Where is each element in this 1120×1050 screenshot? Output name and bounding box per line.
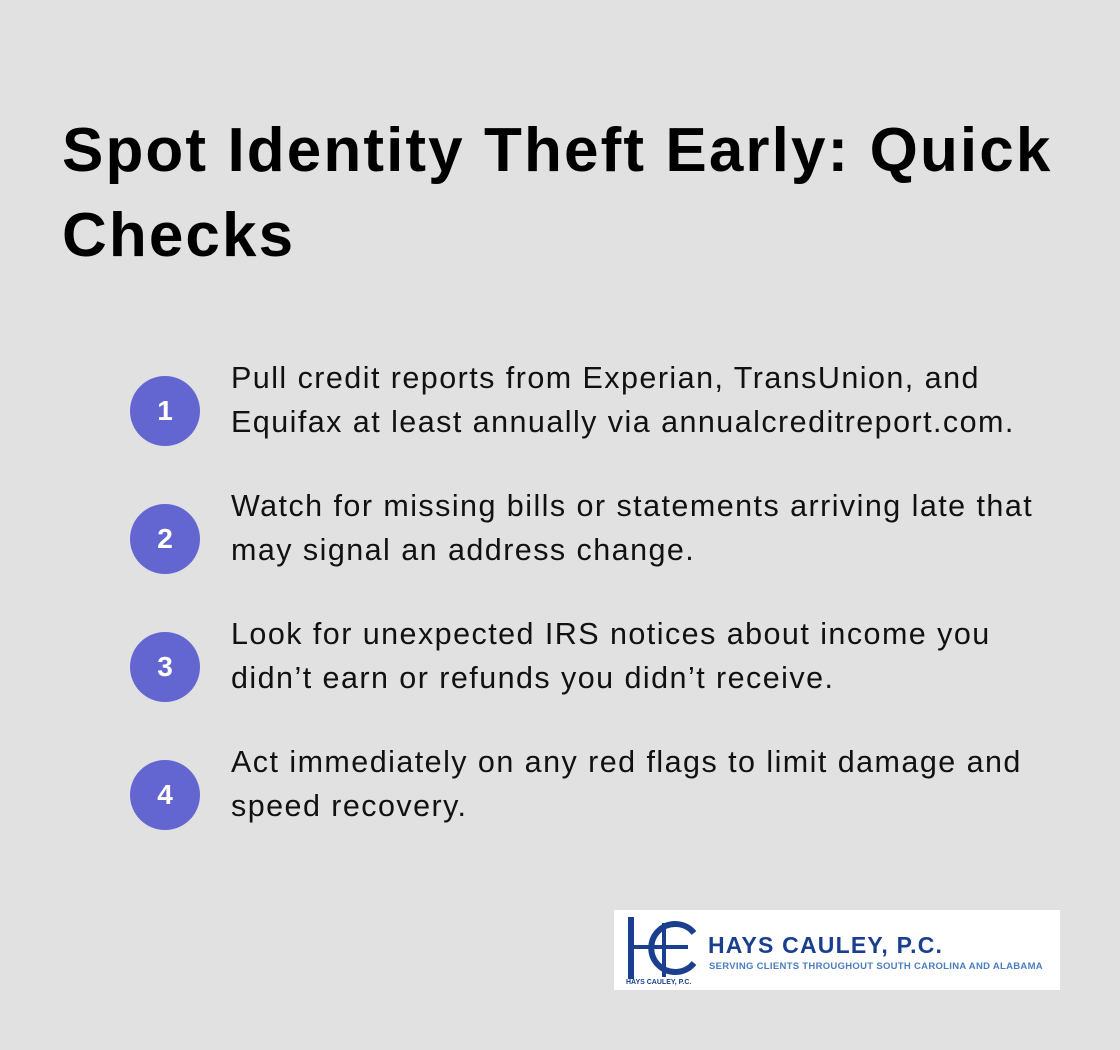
text 2: Watch for missing bills or statements arriving late that xyxy=(231,489,1033,523)
logo: HAYS CAULEY, P.C. xyxy=(626,979,691,986)
title: Spot Identity Theft Early: Quick xyxy=(62,116,1052,185)
item 4 xyxy=(130,745,1022,830)
logo tagline: SERVING CLIENTS THROUGHOUT SOUTH CAROLINA AND ALABAMA xyxy=(709,961,1043,972)
text 4: Act immediately on any red flags to limit damage and xyxy=(231,745,1022,779)
title xyxy=(62,116,1052,270)
icon: number 4 xyxy=(130,760,200,830)
logo xyxy=(614,910,1060,990)
item 2 xyxy=(130,489,1033,574)
text 4: speed recovery. xyxy=(231,789,468,823)
icon: number 3: 3 xyxy=(157,651,173,682)
item 1 xyxy=(130,361,1015,446)
icon: number 2: 2 xyxy=(157,523,173,554)
text 1: Equifax at least annually via annualcreditreport.com. xyxy=(231,405,1015,439)
logo name: HAYS CAULEY, P.C. xyxy=(708,932,943,958)
text 3 xyxy=(231,617,991,695)
icon: number 3 xyxy=(130,632,200,702)
text 3: Look for unexpected IRS notices about income you xyxy=(231,617,991,651)
text 3: didn’t earn or refunds you didn’t receive. xyxy=(231,661,834,695)
text 2 xyxy=(231,489,1033,567)
icon: number 4: 4 xyxy=(157,779,173,810)
text 4 xyxy=(231,745,1022,823)
item 3 xyxy=(130,617,991,702)
title: Checks xyxy=(62,201,295,270)
text 1: Pull credit reports from Experian, TransUnion, and xyxy=(231,361,980,395)
icon: HC monogram xyxy=(628,917,696,979)
icon: number 1 xyxy=(130,376,200,446)
icon: number 1: 1 xyxy=(157,395,173,426)
icon: number 2 xyxy=(130,504,200,574)
text 1 xyxy=(231,361,1015,439)
text 2: may signal an address change. xyxy=(231,533,695,567)
